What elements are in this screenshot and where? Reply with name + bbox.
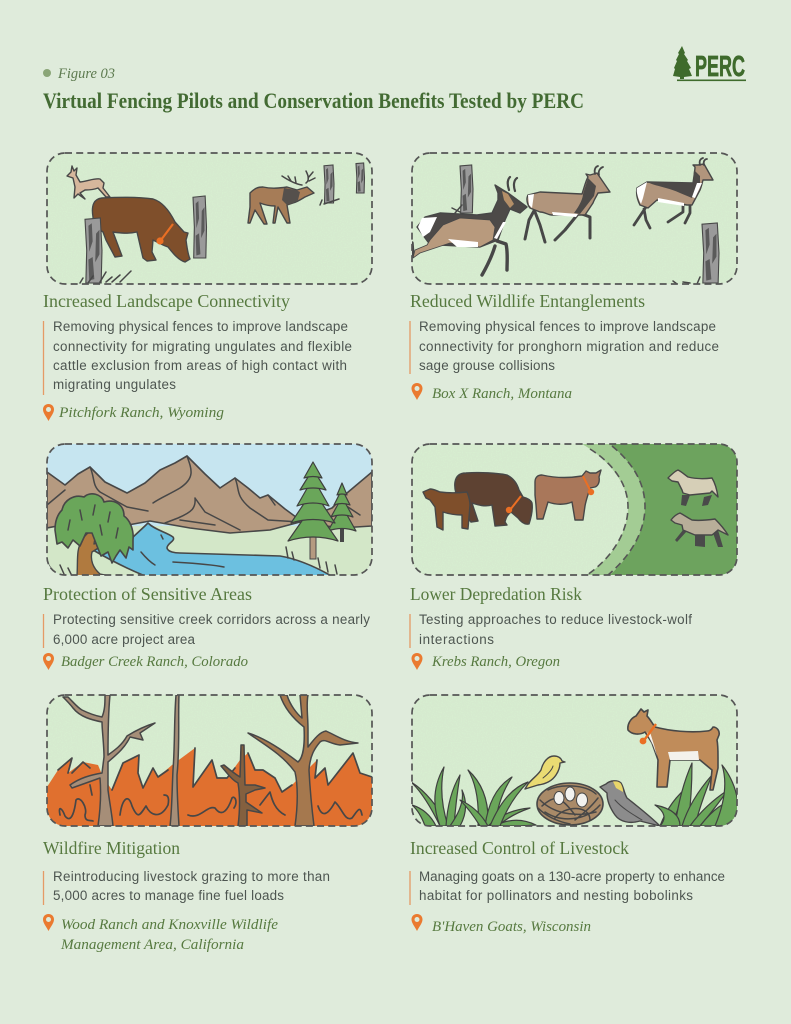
- location: Wood Ranch and Knoxville: Wood Ranch and Knoxville Wildlife: [61, 917, 279, 933]
- panel: wildfire illustration: [47, 695, 372, 830]
- location: Wood Ranch and Knoxville: Management Area, California: [60, 937, 244, 953]
- grey bird: [600, 781, 660, 826]
- description: connectivity: connectivity for migrating ungulates and flexible: [53, 339, 352, 354]
- elk: [248, 171, 315, 224]
- heading: control of livestock: Increased Control of Livestock: [410, 838, 629, 858]
- calf: [423, 489, 470, 530]
- description: connectivity: cattle exclusion from areas of high contact with: [53, 358, 347, 373]
- dark cow with collar: [455, 473, 532, 526]
- description: depredation: Testing approaches to reduce livestock-wolf: [419, 612, 692, 627]
- wolf lower: [671, 513, 728, 547]
- fence post right: [673, 223, 719, 284]
- pronghorn middle: [525, 166, 610, 242]
- wolf upper: [668, 470, 718, 506]
- location: Krebs Ranch: Krebs Ranch, Oregon: [431, 654, 560, 670]
- meadow: [47, 526, 372, 576]
- panel: sensitive areas illustration: [47, 444, 372, 578]
- cow with collar: [92, 197, 190, 262]
- location: Box X Ranch: Box X Ranch, Montana: [432, 386, 572, 402]
- description: sensitive areas: 6,000 acre project area: [53, 632, 196, 647]
- heading: wildfire: Wildfire Mitigation: [43, 838, 180, 858]
- heading: depredation: Lower Depredation Risk: [410, 584, 582, 604]
- description: control of livestock: habitat for pollinators and nesting bobolinks: [419, 888, 693, 903]
- panel: landscape connectivity illustration: [47, 153, 372, 284]
- burnt tree 1: [63, 695, 155, 826]
- burnt tree 2: [170, 695, 179, 826]
- description: depredation: [410, 612, 692, 648]
- nest with eggs: [537, 783, 603, 825]
- panel: control of livestock illustration: [411, 695, 739, 826]
- description: control of livestock: [410, 869, 725, 905]
- description: entanglements: connectivity for pronghorn migration and reduce: [419, 339, 719, 354]
- panel: wildlife entanglements illustration: [412, 153, 737, 284]
- fence post behind cow: [193, 196, 206, 258]
- description: sensitive areas: [44, 612, 370, 648]
- fence post mid right: [320, 165, 339, 205]
- panel: depredation illustration: [412, 444, 737, 575]
- grass cluster left: [411, 767, 466, 826]
- tall pine tree: [288, 462, 338, 559]
- mountains: [47, 456, 372, 533]
- description: entanglements: [410, 319, 719, 374]
- logo: PERC: PERC: [695, 51, 745, 83]
- cattle zone: [412, 444, 628, 575]
- title: Virtual Fencing Pilots and Conservation Benefits Tested by PERC: [43, 88, 584, 113]
- pronghorn leaping: [634, 158, 713, 228]
- burnt tree 3: [221, 745, 265, 826]
- fence post in foreground: [80, 218, 131, 283]
- flames: [47, 748, 372, 830]
- description: connectivity: migrating ungulates: [53, 377, 176, 392]
- pronghorn large: [412, 177, 527, 275]
- dashed border: [412, 444, 737, 575]
- location: Badger Creek Ranch: Badger Creek Ranch, Colorado: [61, 654, 248, 670]
- description: wildfire: Reintroducing livestock grazing to more than: [53, 869, 330, 884]
- location: B'Haven Goats: [412, 914, 591, 935]
- location: Wood Ranch and Knoxville: [43, 914, 279, 953]
- fence post far right: [356, 163, 364, 193]
- description: entanglements: Removing physical fences to improve landscape: [419, 319, 716, 334]
- burnt tree 4: [248, 695, 358, 826]
- grass cluster right: [655, 763, 739, 826]
- figure label: Figure 03: [57, 66, 115, 82]
- logo: PERC: [673, 46, 746, 83]
- buffer band: [582, 444, 645, 575]
- tan cow with collar: [535, 470, 601, 520]
- heading: connectivity: Increased Landscape Connectivity: [43, 291, 290, 311]
- location: Pitchfork Ranch: Pitchfork Ranch, Wyoming: [58, 405, 224, 421]
- small pine tree: [328, 483, 356, 542]
- yellow bird: [525, 756, 565, 789]
- grass cluster centre: [460, 770, 536, 826]
- heading: sensitive areas: Protection of Sensitive Areas: [43, 584, 252, 604]
- description: depredation: interactions: [419, 632, 494, 647]
- description: wildfire: [44, 869, 330, 905]
- description: wildfire: 5,000 acres to manage fine fuel loads: [53, 888, 284, 903]
- willow tree: [55, 494, 133, 576]
- location: B'Haven Goats: B'Haven Goats, Wisconsin: [432, 919, 591, 935]
- leaping deer: [67, 166, 110, 199]
- description: connectivity: [44, 319, 352, 395]
- dashed border: [47, 444, 372, 575]
- dashed border: [47, 153, 372, 284]
- river bank grass: [47, 547, 337, 576]
- description: sensitive areas: Protecting sensitive creek corridors across a nearly: [53, 612, 370, 627]
- description: control of livestock: Managing goats on a 130-acre property to enhance: [419, 869, 725, 884]
- description: entanglements: sage grouse collisions: [419, 358, 555, 373]
- goat with collar: [628, 709, 719, 790]
- dashed border: [47, 695, 372, 826]
- fence post behind pronghorn: [452, 165, 473, 213]
- river: [93, 523, 335, 578]
- heading: entanglements: Reduced Wildlife Entanglements: [410, 291, 645, 311]
- description: connectivity: Removing physical fences to improve landscape: [53, 319, 348, 334]
- dashed border: [412, 695, 737, 826]
- dashed border: [412, 153, 737, 284]
